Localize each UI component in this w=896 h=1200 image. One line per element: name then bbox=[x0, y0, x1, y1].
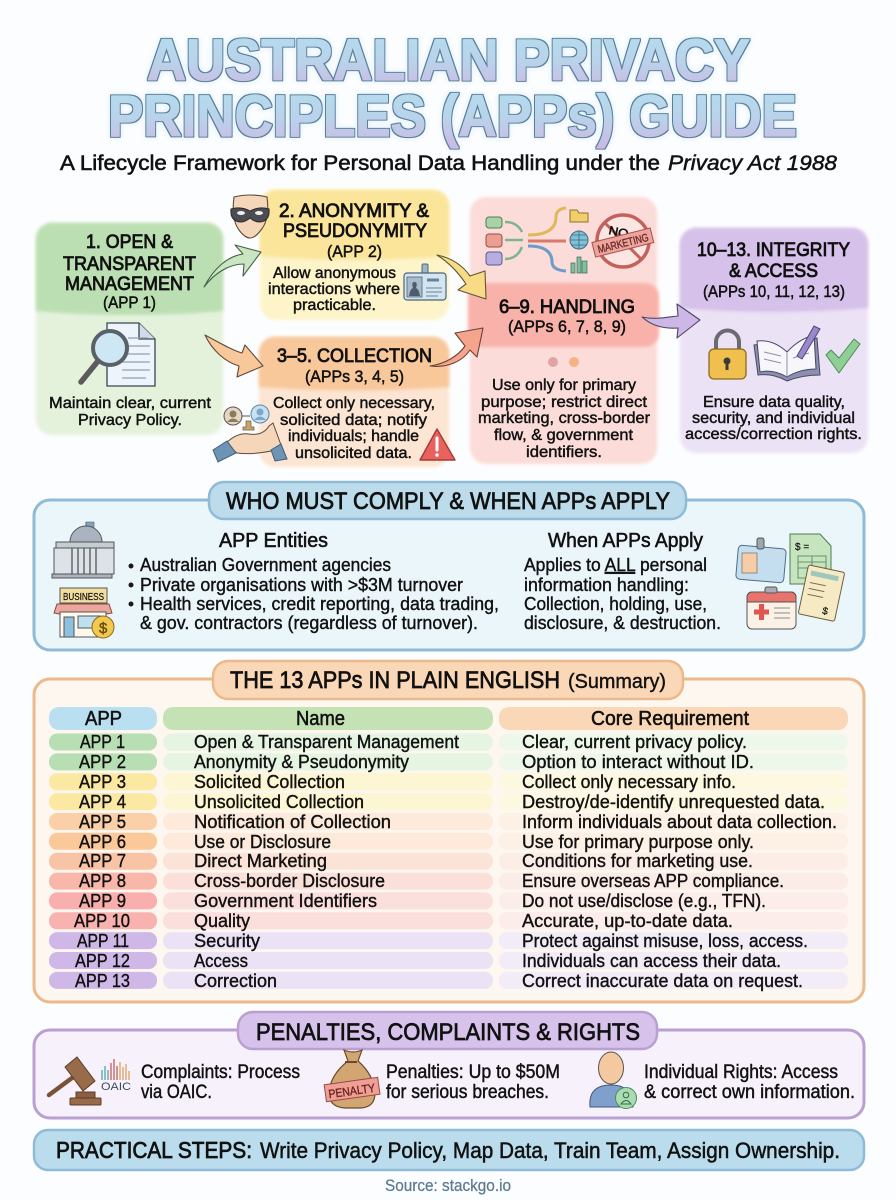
table header row: Name bbox=[296, 708, 345, 730]
table row: APP 10: Accurate, up-to-date data. bbox=[522, 910, 733, 931]
panel: collection bbox=[213, 337, 455, 467]
text: app 2 description: interactions where bbox=[268, 281, 400, 298]
text: app 2 description: practicable. bbox=[293, 297, 376, 314]
table header row: Core Requirement bbox=[591, 708, 749, 730]
heading tab: who must comply bbox=[209, 482, 686, 519]
icon: penalty money bag bbox=[324, 1050, 380, 1108]
heading: apps 3 to 5 bbox=[277, 345, 432, 386]
arrow: app 1 to collection bbox=[205, 335, 263, 377]
icon: no marketing stamp: MARKETING bbox=[597, 232, 650, 256]
banner: practical steps: PRACTICAL STEPS: bbox=[56, 1137, 252, 1163]
table row: APP 7: Direct Marketing bbox=[194, 850, 327, 871]
table row: APP 9: APP 9 bbox=[79, 890, 126, 911]
icon: gavel bbox=[49, 1057, 101, 1105]
table row: APP 3: Solicited Collection bbox=[194, 771, 345, 792]
icon: documents and id cards bbox=[736, 534, 845, 629]
table row: APP 6: Use for primary purpose only. bbox=[522, 831, 754, 852]
table row: APP 6 bbox=[49, 831, 848, 852]
text: app 1 description: Privacy Policy. bbox=[78, 412, 182, 429]
text: integrity description: security, and individual bbox=[692, 410, 855, 427]
text: app 1 description bbox=[49, 395, 212, 429]
text: collection description: solicited data; notify bbox=[280, 412, 427, 429]
table row: APP 1: Open & Transparent Management bbox=[194, 731, 459, 752]
icon: padlock bbox=[709, 331, 746, 379]
banner: practical steps: Write Privacy Policy, Map Data, Train Team, Assign Ownership. bbox=[260, 1138, 840, 1163]
text: handling description: marketing, cross-border bbox=[478, 410, 651, 427]
arrow: collection to handling bbox=[430, 328, 483, 366]
table row: APP 12: APP 12 bbox=[75, 950, 130, 971]
icon: warning triangle bbox=[420, 429, 455, 460]
table row: APP 7: Conditions for marketing use. bbox=[522, 850, 753, 871]
table row: APP 6: Use or Disclosure bbox=[194, 831, 331, 852]
text: handling description: purpose; restrict direct bbox=[481, 394, 648, 411]
text: handling description bbox=[478, 377, 651, 461]
heading: app 1: TRANSPARENT bbox=[63, 253, 196, 275]
icon: magnifier over document bbox=[81, 323, 155, 386]
table row: APP 10 bbox=[49, 910, 848, 931]
text: penalties bbox=[386, 1062, 560, 1103]
text: handling description: flow, & government bbox=[494, 427, 634, 444]
title: PRINCIPLES (APPs) GUIDE bbox=[108, 84, 797, 149]
heading: apps 3 to 5: 3–5. COLLECTION bbox=[277, 345, 432, 367]
heading: app 2: PSEUDONYMITY bbox=[283, 220, 427, 242]
text: when apps apply: disclosure, & destruction. bbox=[524, 612, 721, 633]
heading: app 2: 2. ANONYMITY & bbox=[279, 200, 429, 222]
heading: apps 6 to 9 bbox=[499, 296, 635, 336]
table row: APP 5: APP 5 bbox=[79, 811, 126, 832]
table row: APP 11: APP 11 bbox=[77, 930, 129, 951]
table row: APP 6: APP 6 bbox=[79, 831, 126, 852]
table row: APP 2: Option to interact without ID. bbox=[522, 751, 754, 772]
table row: APP 9: Do not use/disclose (e.g., TFN). bbox=[522, 890, 766, 911]
table row: APP 3: Collect only necessary info. bbox=[522, 771, 736, 792]
table row: APP 8 bbox=[49, 870, 848, 891]
text: complaints bbox=[141, 1062, 300, 1103]
text: when apps apply: When APPs Apply bbox=[548, 530, 703, 552]
icon: documents and id cards: $ bbox=[821, 606, 829, 618]
icon: documents and id cards: $ = bbox=[795, 542, 809, 553]
text: integrity description bbox=[685, 394, 862, 443]
table row: APP 4: Unsolicited Collection bbox=[194, 791, 364, 812]
table row: APP 11: Security bbox=[194, 930, 261, 951]
title bbox=[108, 28, 797, 149]
icon: data flows bbox=[486, 208, 588, 273]
table row: APP 7: APP 7 bbox=[79, 850, 126, 871]
heading: apps 3 to 5: (APPs 3, 4, 5) bbox=[305, 368, 404, 386]
text: individual rights: Individual Rights: Access bbox=[644, 1062, 838, 1083]
table row: APP 4: Destroy/de-identify unrequested data. bbox=[522, 791, 825, 812]
icon: oaic logo: OAIC bbox=[101, 1081, 131, 1093]
icon: oaic logo bbox=[101, 1059, 131, 1093]
heading: app 2: (APP 2) bbox=[327, 243, 382, 261]
subtitle: Privacy Act 1988 bbox=[668, 151, 837, 175]
text: complaints: via OAIC. bbox=[141, 1082, 212, 1103]
text: app 2 description: Allow anonymous bbox=[273, 265, 396, 282]
table row: APP 1 bbox=[49, 731, 848, 752]
arrow: handling to integrity bbox=[642, 304, 700, 338]
title: AUSTRALIAN PRIVACY bbox=[147, 28, 750, 93]
text: collection description: Collect only necessary, bbox=[273, 395, 435, 412]
table row: APP 1: Clear, current privacy policy. bbox=[522, 731, 747, 752]
heading tab: penalties bbox=[238, 1012, 657, 1049]
heading: apps 10 to 13: 10–13. INTEGRITY bbox=[697, 239, 850, 261]
table row: APP 13: Correct inaccurate data on request. bbox=[522, 970, 803, 991]
table row: APP 3: APP 3 bbox=[79, 771, 126, 792]
arrow: app 2 to handling bbox=[437, 255, 486, 299]
heading tab: the 13 apps bbox=[213, 661, 683, 699]
table row: APP 8: APP 8 bbox=[79, 870, 126, 891]
icon: open book and pen bbox=[754, 326, 820, 381]
heading: app 1: (APP 1) bbox=[103, 294, 156, 312]
icon: no marketing stamp: NO bbox=[607, 223, 630, 241]
table row: APP 12: Individuals can access their data. bbox=[522, 950, 781, 971]
table row: APP 5: Notification of Collection bbox=[194, 811, 391, 832]
text: app entities: & gov. contractors (regardless of turnover). bbox=[140, 612, 478, 633]
table row: APP 1: APP 1 bbox=[80, 731, 125, 752]
text: when apps apply: Collection, holding, use, bbox=[524, 593, 707, 614]
text: collection description: unsolicited data. bbox=[295, 445, 412, 462]
panel: handling bbox=[468, 197, 659, 464]
icon: check mark bbox=[826, 339, 860, 373]
text: penalties: for serious breaches. bbox=[386, 1082, 549, 1103]
panel: who must comply bbox=[34, 482, 864, 650]
heading: app 1: MANAGEMENT bbox=[65, 273, 194, 295]
text: when apps apply bbox=[524, 530, 721, 633]
icon: government building bbox=[52, 522, 114, 578]
table row: APP 13 bbox=[49, 970, 848, 991]
text: individual rights bbox=[644, 1062, 855, 1103]
text: when apps apply: Applies to ALL personal bbox=[524, 554, 707, 575]
panel: the 13 apps table bbox=[34, 661, 864, 1002]
table header row: APP bbox=[85, 708, 122, 730]
heading: apps 10 to 13: (APPs 10, 11, 12, 13) bbox=[703, 283, 845, 301]
icon: id badge bbox=[404, 264, 446, 300]
table row: APP 8: Ensure overseas APP compliance. bbox=[522, 870, 784, 891]
table row: APP 8: Cross-border Disclosure bbox=[194, 870, 385, 891]
table row: APP 12: Access bbox=[194, 950, 248, 971]
table row: APP 11: Protect against misuse, loss, access. bbox=[522, 930, 808, 951]
text: app 1 description: Maintain clear, current bbox=[49, 395, 212, 412]
text: app entities: Private organisations with >$3M turnover bbox=[140, 574, 463, 595]
table row: APP 2: Anonymity & Pseudonymity bbox=[194, 751, 410, 772]
icon: business shop: $ bbox=[99, 620, 108, 637]
icon: business shop: BUSINESS bbox=[63, 592, 104, 603]
heading: apps 10 to 13 bbox=[697, 239, 850, 301]
arrow: app 1 to app 2 bbox=[204, 245, 261, 287]
table row: APP 7 bbox=[49, 850, 848, 871]
text: app entities bbox=[128, 530, 499, 633]
table row: APP 10: Quality bbox=[194, 910, 251, 931]
table row: APP 2 bbox=[49, 751, 848, 772]
table row: APP 9 bbox=[49, 890, 848, 911]
text: app 2 description bbox=[268, 265, 400, 314]
heading: app 1 bbox=[63, 231, 196, 312]
heading: apps 6 to 9: (APPs 6, 7, 8, 9) bbox=[508, 318, 626, 336]
subtitle: A Lifecycle Framework for Personal Data Handling under the bbox=[60, 151, 660, 175]
heading: app 1: 1. OPEN & bbox=[86, 231, 173, 253]
text: when apps apply: information handling: bbox=[524, 574, 689, 595]
table row: APP 5: Inform individuals about data collection. bbox=[522, 811, 837, 832]
heading tab: the 13 apps: (Summary) bbox=[568, 671, 666, 693]
text: app entities: Health services, credit reporting, data trading, bbox=[140, 593, 499, 614]
table row: APP 3 bbox=[49, 771, 848, 792]
text: handling description: identifiers. bbox=[526, 444, 602, 461]
icon: business shop bbox=[54, 588, 114, 638]
icon: hands exchanging data bbox=[213, 405, 287, 462]
table row: APP 4 bbox=[49, 791, 848, 812]
text: integrity description: Ensure data quality, bbox=[703, 394, 845, 411]
heading tab: penalties: PENALTIES, COMPLAINTS & RIGHTS bbox=[256, 1019, 640, 1046]
banner: practical steps bbox=[34, 1130, 864, 1170]
text: app entities: Australian Government agencies bbox=[140, 554, 391, 575]
icon: masked face bbox=[231, 195, 269, 238]
table row: APP 2: APP 2 bbox=[79, 751, 126, 772]
heading tab: who must comply: WHO MUST COMPLY & WHEN APPs APPLY bbox=[226, 488, 670, 515]
text: collection description bbox=[273, 395, 435, 462]
icon: no marketing stamp bbox=[592, 215, 654, 267]
table row: APP 13: Correction bbox=[194, 970, 277, 991]
panel: open and transparent management bbox=[36, 223, 223, 435]
panel: anonymity and pseudonymity bbox=[231, 190, 449, 320]
panel: integrity and access bbox=[680, 228, 868, 453]
table header row bbox=[49, 707, 848, 730]
text: complaints: Complaints: Process bbox=[141, 1062, 300, 1083]
text: integrity description: access/correction rights. bbox=[685, 426, 862, 443]
text: handling description: Use only for primary bbox=[492, 377, 636, 394]
text: collection description: individuals; handle bbox=[288, 428, 419, 445]
panel: penalties, complaints and rights bbox=[34, 1012, 864, 1118]
table row: APP 9: Government Identifiers bbox=[194, 890, 377, 911]
heading: apps 6 to 9: 6–9. HANDLING bbox=[499, 296, 635, 318]
table row: APP 12 bbox=[49, 950, 848, 971]
source note: Source: stackgo.io bbox=[385, 1176, 511, 1195]
icon: penalty money bag: PENALTY bbox=[328, 1081, 376, 1101]
text: individual rights: & correct own information. bbox=[644, 1082, 855, 1103]
text: app entities: APP Entities bbox=[219, 530, 328, 552]
table row: APP 13: APP 13 bbox=[75, 970, 130, 991]
heading: apps 10 to 13: & ACCESS bbox=[729, 260, 818, 282]
heading: app 2 bbox=[279, 200, 429, 261]
table row: APP 5 bbox=[49, 811, 848, 832]
icon: individual with badge bbox=[590, 1052, 636, 1108]
heading tab: the 13 apps: THE 13 APPs IN PLAIN ENGLISH bbox=[230, 667, 560, 694]
text: penalties: Penalties: Up to $50M bbox=[386, 1062, 560, 1083]
table row: APP 11 bbox=[49, 930, 848, 951]
table row: APP 4: APP 4 bbox=[79, 791, 126, 812]
table row: APP 10: APP 10 bbox=[74, 910, 130, 931]
decorative status dots bbox=[548, 357, 579, 367]
